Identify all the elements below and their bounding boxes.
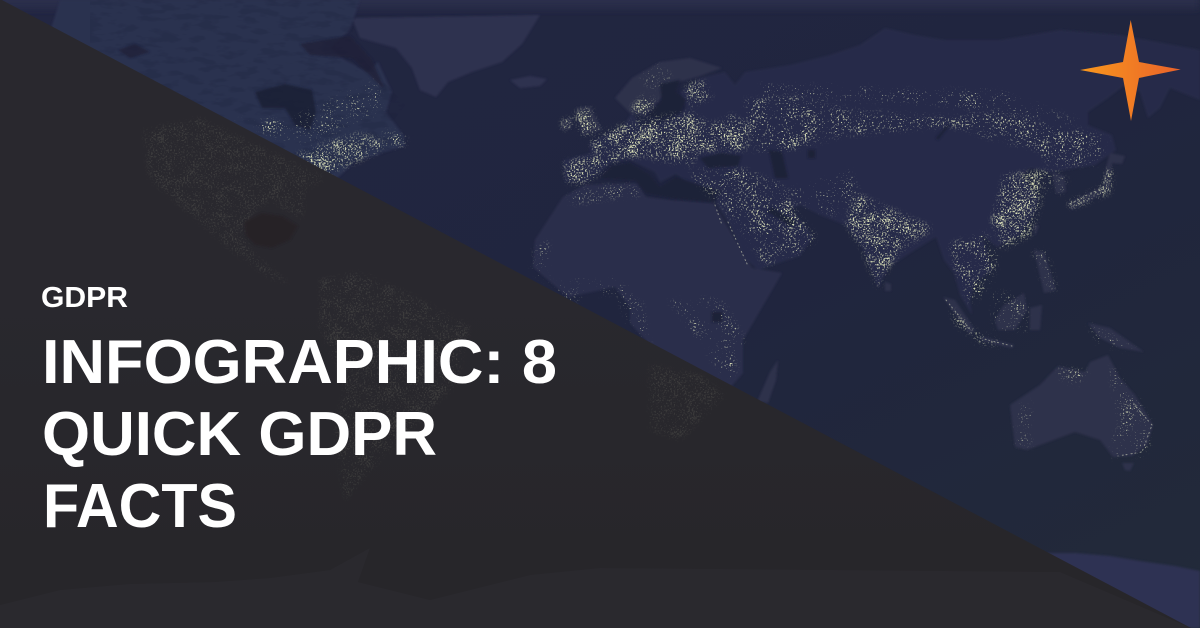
sulawesi and philippines — [1030, 250, 1056, 330]
lake victoria — [712, 312, 722, 322]
baltic sea — [648, 80, 686, 118]
arctic ice texture — [90, 0, 410, 180]
british isles — [561, 106, 602, 135]
caspian sea — [769, 150, 788, 178]
japan — [1068, 153, 1125, 210]
arctic ice band — [0, 0, 1200, 8]
city lights medium — [381, 64, 1111, 350]
java — [980, 336, 1014, 348]
eurasia — [563, 28, 1200, 315]
title: INFOGRAPHIC: 8 — [42, 328, 557, 397]
africa — [533, 183, 782, 440]
greenland — [352, 15, 540, 97]
scandinavia — [615, 58, 722, 116]
tasmania — [1122, 463, 1134, 471]
dark inland seas — [118, 36, 950, 322]
hudson bay — [255, 84, 316, 130]
orange four-point star logo — [1080, 20, 1181, 121]
borneo — [995, 293, 1027, 330]
title — [42, 328, 557, 541]
sumatra — [943, 297, 975, 335]
gulf of mexico — [244, 213, 298, 248]
mediterranean sea — [600, 163, 714, 202]
iceland — [510, 76, 547, 88]
city lights sparse — [234, 78, 1154, 459]
korea — [1052, 172, 1066, 194]
canada and alaska — [0, 0, 405, 190]
australia — [1010, 355, 1153, 457]
sri lanka and taiwan — [885, 225, 1039, 291]
aral and baikal — [808, 125, 950, 158]
new guinea — [1088, 323, 1144, 352]
antarctica under panel — [0, 548, 1191, 628]
baffin bay channels — [118, 36, 385, 90]
category label: GDPR — [41, 282, 128, 314]
bright coastal lights — [715, 170, 1152, 456]
city lights dense — [296, 78, 1116, 288]
title: FACTS — [43, 472, 237, 541]
faint lights of the americas under panel — [144, 118, 722, 496]
antarctica — [1040, 553, 1200, 628]
black sea — [700, 153, 741, 168]
title: QUICK GDPR — [42, 400, 437, 469]
persian gulf — [768, 207, 797, 226]
madagascar — [757, 360, 778, 403]
